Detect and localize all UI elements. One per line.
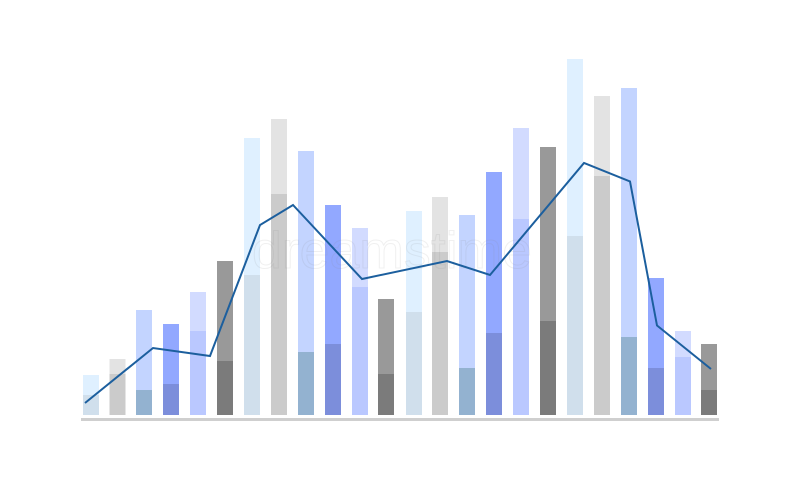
- bars: [83, 59, 717, 415]
- trend line: [85, 163, 711, 403]
- watermark text: dreamstime: [252, 222, 532, 280]
- x axis baseline: [81, 418, 719, 421]
